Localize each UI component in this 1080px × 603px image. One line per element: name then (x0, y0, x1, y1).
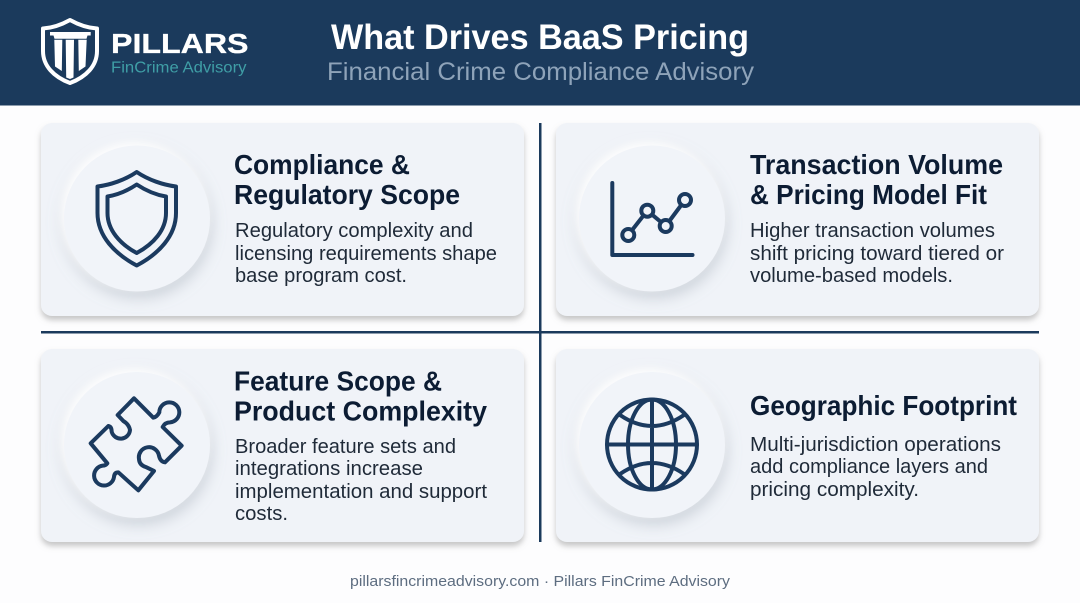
subtitle: Financial Crime Compliance Advisory (327, 58, 755, 86)
icon: shield (64, 146, 210, 292)
body text: shift pricing toward tiered or (750, 243, 1004, 265)
body text (750, 220, 1004, 287)
body text: Higher transaction volumes (750, 220, 995, 242)
heading: & Pricing Model Fit (750, 179, 987, 210)
body text: Broader feature sets and (235, 436, 456, 458)
body text: Multi-jurisdiction operations (750, 434, 1001, 456)
heading: Feature Scope & (234, 366, 442, 396)
body text: volume-based models. (750, 265, 953, 287)
body text: Regulatory complexity and (235, 220, 473, 242)
heading: Product Complexity (234, 396, 488, 426)
body text (750, 434, 1001, 501)
body text: pricing complexity. (750, 479, 919, 501)
footer: pillarsfincrimeadvisory.com · Pillars FinCrime Advisory (350, 573, 731, 590)
title: What Drives BaaS Pricing (331, 18, 749, 57)
logo wordmark: PILLARS (111, 28, 248, 59)
heading (234, 366, 488, 426)
body text: implementation and support (235, 481, 487, 503)
logo tagline: FinCrime Advisory (111, 60, 247, 76)
body text: base program cost. (235, 265, 407, 287)
heading: Regulatory Scope (234, 179, 460, 210)
panel: compliance and regulatory scope (41, 123, 524, 316)
panel: feature scope and product complexity (41, 349, 524, 542)
body text: integrations increase (235, 458, 423, 480)
heading: Transaction Volume (750, 149, 1003, 180)
body text: licensing requirements shape (235, 243, 497, 265)
body text (235, 436, 487, 525)
heading (234, 149, 460, 210)
body text: costs. (235, 503, 288, 525)
panel: transaction volume and pricing model fit (556, 123, 1039, 316)
header band (0, 0, 1080, 106)
logo shield (43, 20, 97, 83)
icon: line chart (579, 146, 725, 292)
panel: geographic footprint (556, 349, 1039, 542)
icon: globe (579, 372, 725, 518)
heading: Compliance & (234, 149, 410, 180)
icon: puzzle piece (64, 372, 210, 518)
logo (43, 20, 248, 83)
body text: add compliance layers and (750, 456, 988, 478)
heading (750, 149, 1003, 210)
heading: Geographic Footprint (750, 390, 1017, 421)
body text (235, 220, 497, 287)
